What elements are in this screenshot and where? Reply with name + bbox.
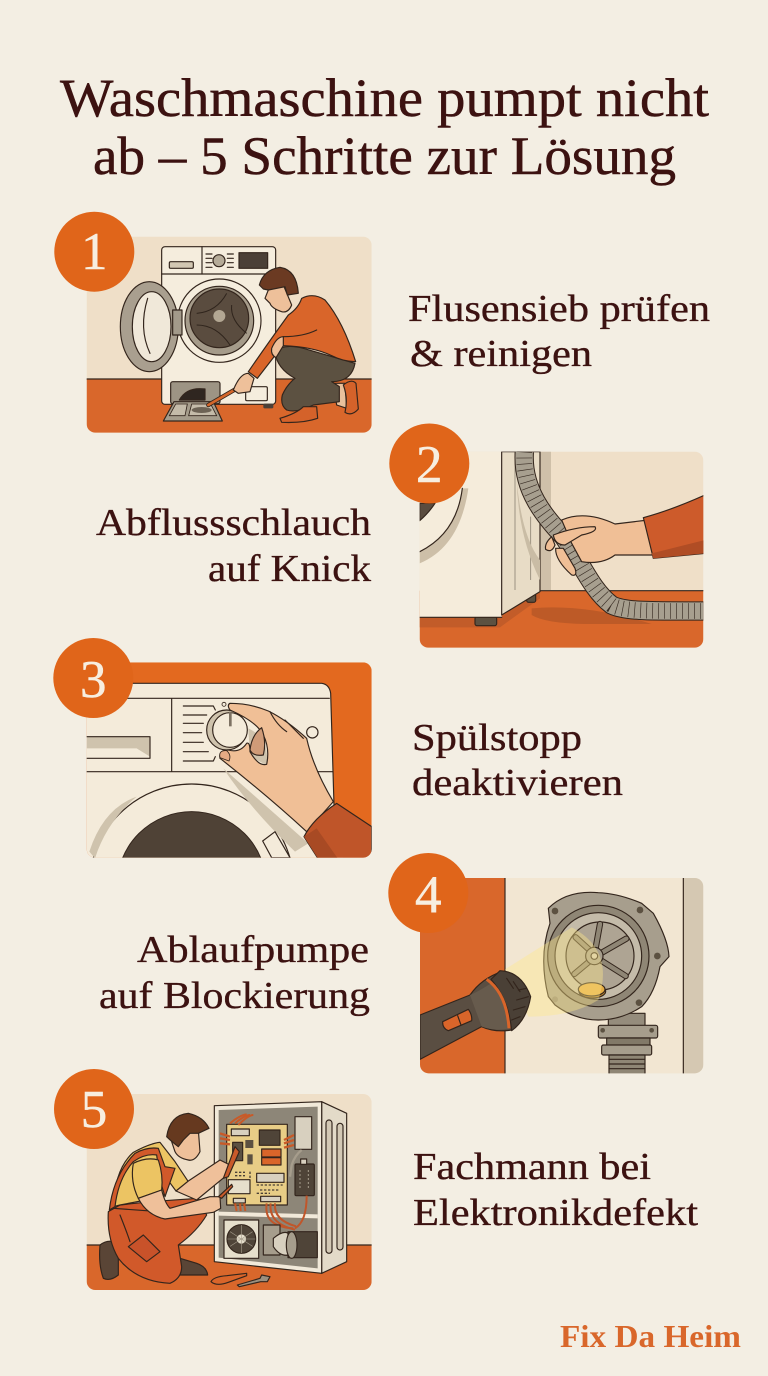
text: step 2: Abflussschlauch	[96, 502, 371, 544]
badge: number 3	[53, 638, 133, 718]
illustration: step 5 technician repairing the electronics	[87, 1094, 372, 1292]
text: step 5: Fachmann bei	[413, 1146, 651, 1188]
badge: number 2: 2	[416, 436, 443, 494]
text: step 3	[412, 717, 623, 804]
text: step 3: Spülstopp	[412, 717, 582, 759]
illustration: step 3 turning the rinse-stop dial	[86, 662, 372, 858]
illustration: step 1 cleaning the lint filter	[87, 237, 372, 436]
badge: number 5: 5	[81, 1081, 107, 1139]
text: step 4: auf Blockierung	[99, 975, 370, 1017]
text: step 2: auf Knick	[208, 548, 371, 590]
illustration: step 2 checking the drain hose	[420, 452, 705, 651]
badge: number 4: 4	[415, 866, 442, 924]
text: step 2	[96, 502, 371, 590]
text: step 1: Flusensieb prüfen	[408, 288, 710, 330]
text: step 4	[99, 929, 370, 1017]
title	[60, 68, 709, 186]
text: step 4: Ablaufpumpe	[137, 929, 369, 971]
badge: number 1	[54, 212, 134, 292]
footer brand: Fix Da Heim	[560, 1318, 741, 1354]
text: step 3: deaktivieren	[412, 762, 623, 804]
badge: number 1: 1	[81, 223, 108, 281]
badge: number 2	[389, 424, 469, 504]
text: step 1: & reinigen	[410, 333, 592, 375]
badge: number 4	[388, 853, 468, 933]
text: step 5	[413, 1146, 698, 1234]
title: Waschmaschine pumpt nicht	[60, 68, 709, 128]
badge: number 3: 3	[80, 651, 107, 709]
illustration: step 4 inspecting the pump with a flashlight	[420, 878, 703, 1075]
text: step 1	[408, 288, 710, 375]
text: step 5: Elektronikdefekt	[413, 1192, 698, 1234]
title: ab – 5 Schritte zur Lösung	[93, 126, 676, 186]
badge: number 5	[54, 1069, 134, 1149]
